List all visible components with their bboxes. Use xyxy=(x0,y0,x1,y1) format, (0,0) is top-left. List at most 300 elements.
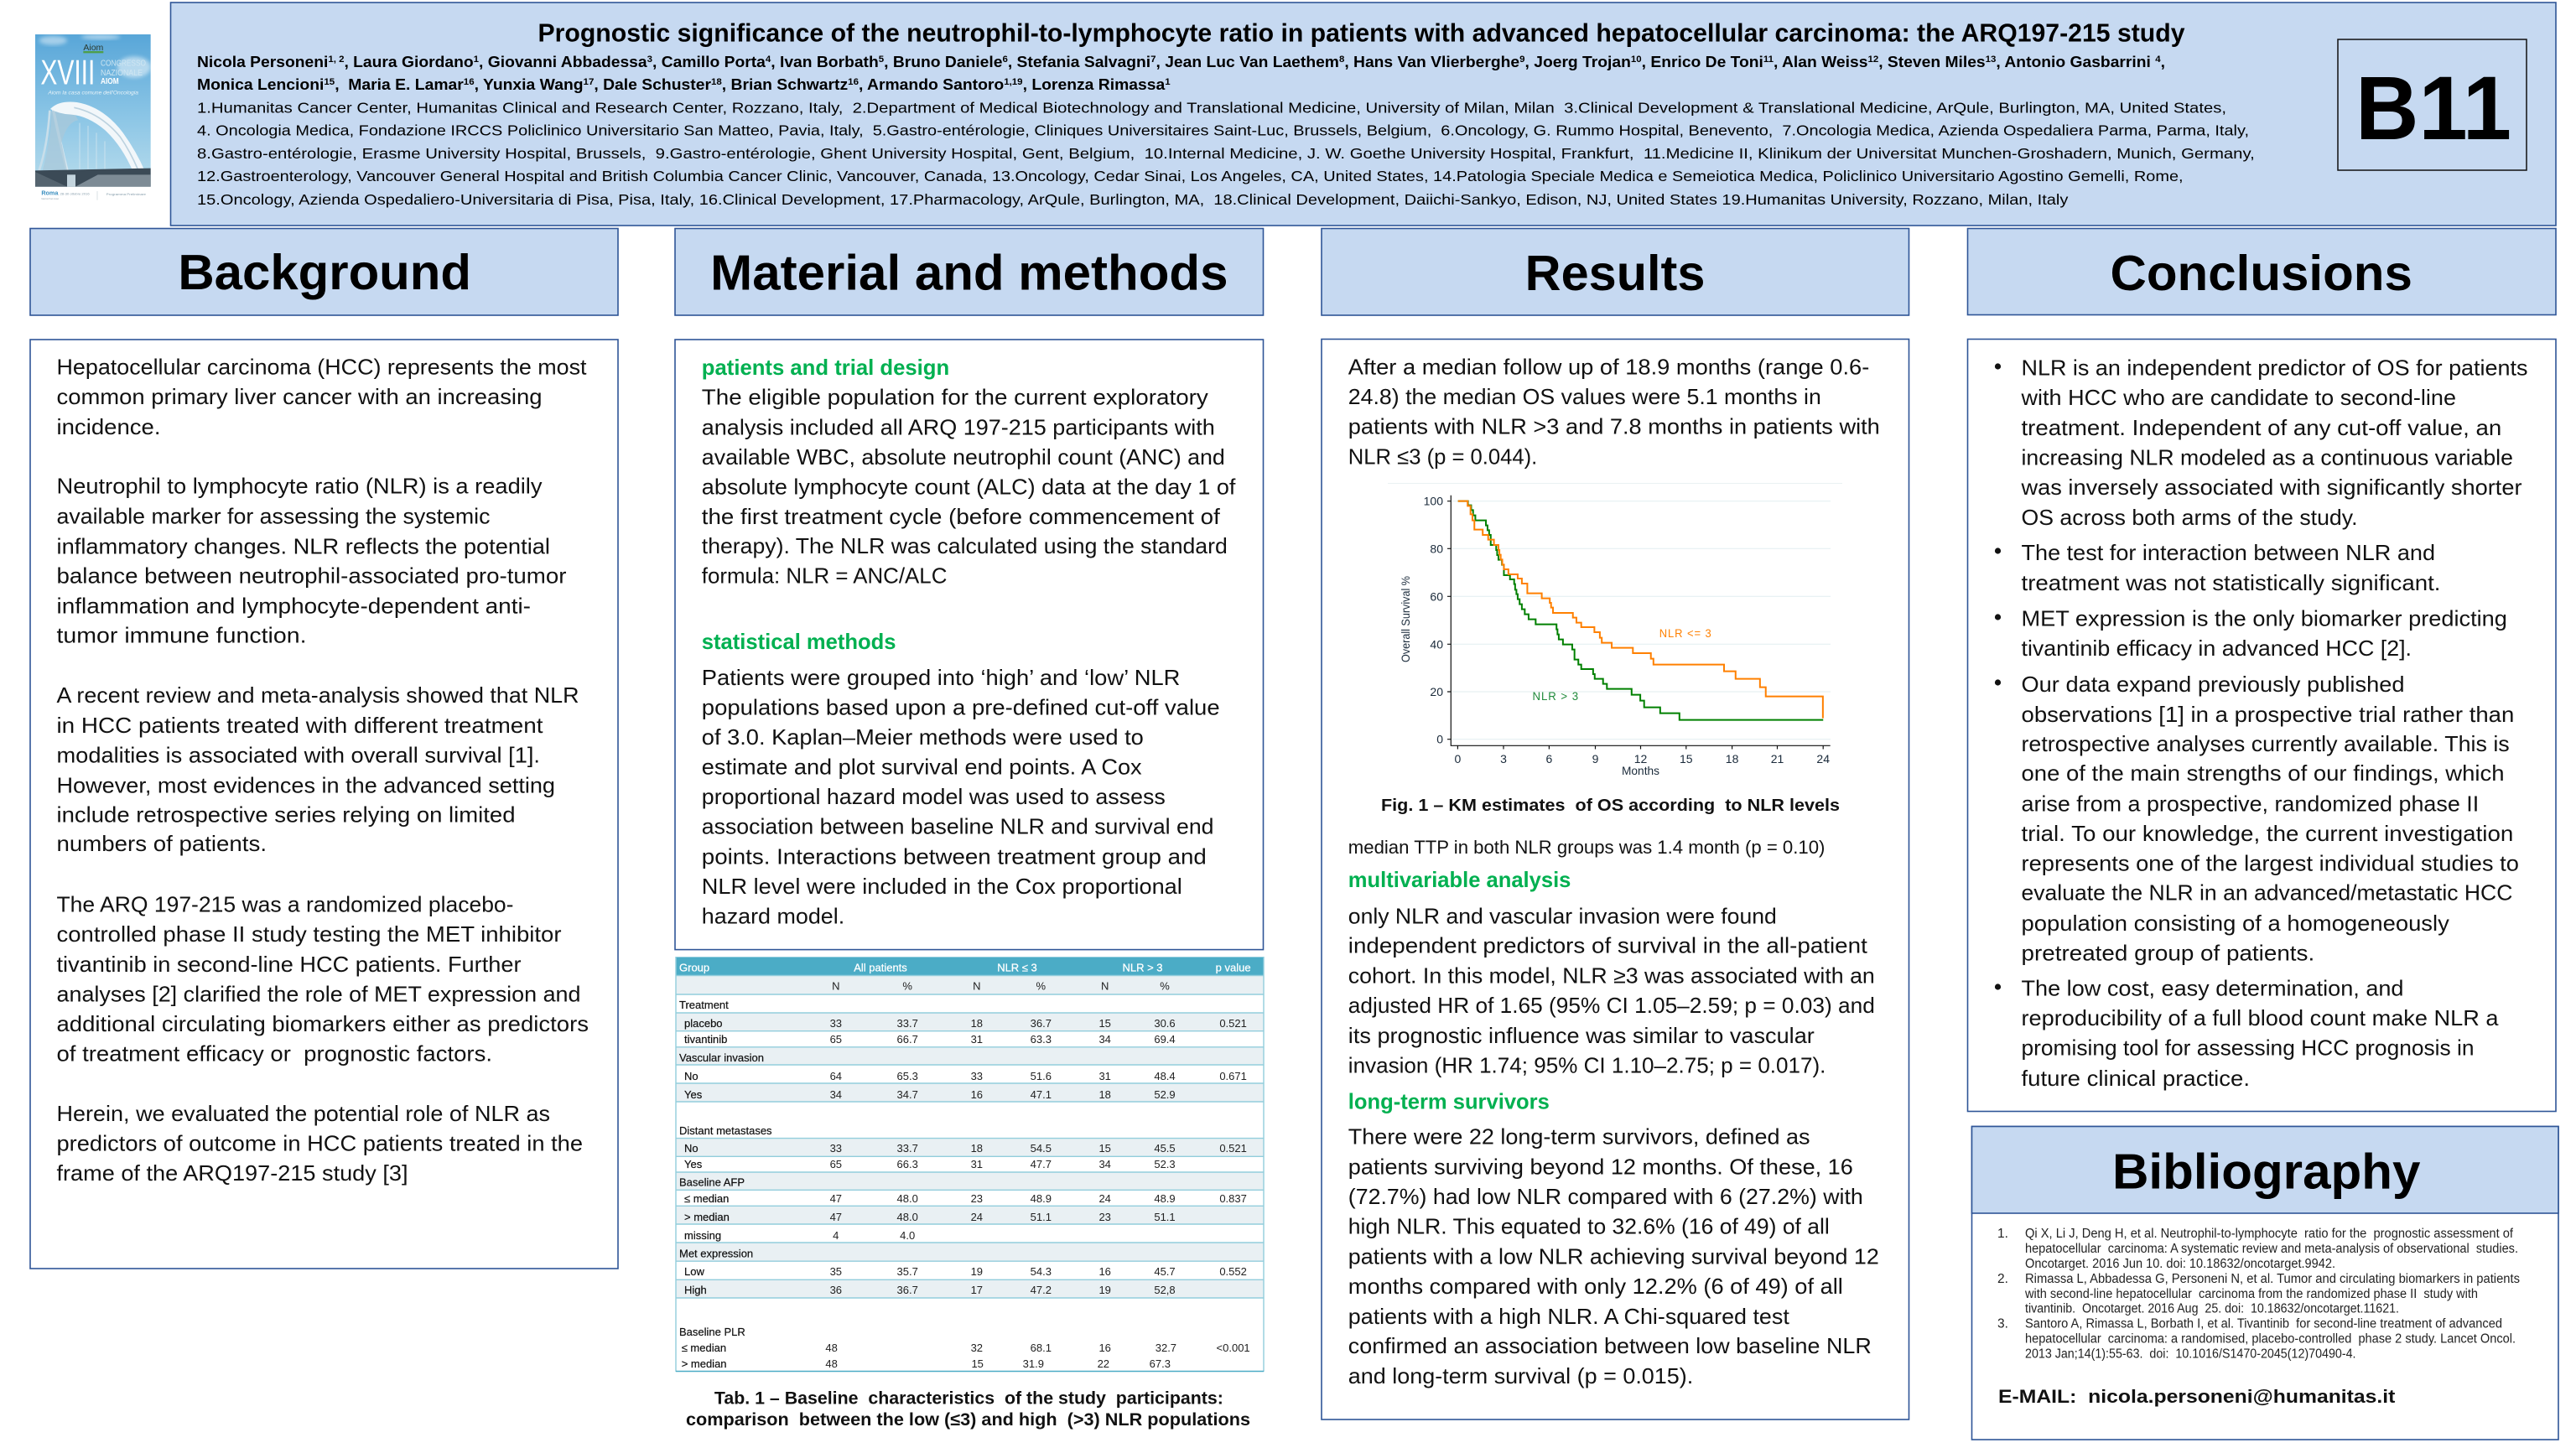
authors: , Armando Santoro xyxy=(859,75,1004,93)
table rows: baseline AFP: 4.0 xyxy=(900,1229,915,1242)
y axis tick labels xyxy=(1424,495,1443,746)
panel frame: bibliography xyxy=(1972,1127,2558,1440)
table rows: met expression: 54.3 xyxy=(1031,1265,1052,1278)
heading: results xyxy=(1322,228,1909,315)
heading: conclusions: Conclusions xyxy=(2110,246,2412,301)
text block: background body: numbers of patients. xyxy=(57,831,267,856)
text block: methods body: therapy). The NLR was calculated using the standard xyxy=(702,533,1228,558)
table rows: distant metastases: 31 xyxy=(971,1158,983,1170)
authors: , Ivan Borbath xyxy=(771,53,879,70)
text block: conclusions bullets: observations [1] in a prospective trial rather than xyxy=(2021,702,2514,727)
x axis tick labels: 6 xyxy=(1546,752,1553,766)
heading: material and methods: Material and methods xyxy=(710,245,1228,300)
panel: material and methods xyxy=(675,228,1264,1430)
text block: background body: balance between neutrophil-associated pro-tumor xyxy=(57,563,567,589)
heading: material and methods xyxy=(675,228,1263,315)
authors: , Yunxia Wang xyxy=(475,75,584,93)
text block: references: 3. xyxy=(1997,1316,2008,1331)
text block: background body: controlled phase II study testing the MET inhibitor xyxy=(57,921,562,947)
table sub-header row xyxy=(832,980,1170,993)
table header row: Group xyxy=(679,961,709,974)
text block: long-term survivors: (72.7%) had low NLR compared with 6 (27.2%) with xyxy=(1348,1184,1863,1209)
authors: 16 xyxy=(848,77,859,87)
text block: references: Santoro A, Rimassa L, Borbath I, et al. Tivantinib for second-line treatment of advanced xyxy=(2025,1316,2502,1331)
table caption xyxy=(686,1388,1250,1430)
authors: 3 xyxy=(647,54,652,65)
authors: 6 xyxy=(1002,54,1008,65)
table rows: distant metastases: 45.5 xyxy=(1154,1142,1176,1155)
heading: bibliography: Bibliography xyxy=(2112,1144,2421,1200)
text block: conclusions bullets: evaluate the NLR in an advanced/metastatic HCC xyxy=(2021,880,2512,906)
text block: long-term survivors: months compared with only 12.2% (6 of 49) of all xyxy=(1348,1274,1843,1299)
table sub-header row: N xyxy=(973,980,980,993)
poster footer: Programma Preliminare xyxy=(106,192,147,196)
y axis title: Overall Survival % xyxy=(1399,576,1412,662)
affiliations: 1.Humanitas Cancer Center, Humanitas Clinical and Research Center, Rozzano, Italy, 2.Department of Medical Biotechnology and Translational Medicine, University of Milan, Milan 3.Clinical Development & Translational Medicine, ArQule, Burlington, MA, United States, xyxy=(197,99,2226,116)
table rows: baseline AFP: > median xyxy=(684,1211,730,1223)
contact email: E-MAIL: nicola.personeni@humanitas.it xyxy=(1998,1386,2396,1407)
table rows: baseline AFP: 4 xyxy=(833,1229,839,1242)
table rows: met expression: Met expression xyxy=(679,1248,753,1260)
table rows: distant metastases: 33 xyxy=(830,1142,842,1155)
table rows: baseline AFP: 47 xyxy=(830,1211,842,1223)
table rows: vascular invasion: Yes xyxy=(684,1088,703,1101)
text block: methods body: association between baseline NLR and survival end xyxy=(702,814,1214,839)
authors: , Dale Schuster xyxy=(594,75,711,93)
text block: background body: Hepatocellular carcinoma (HCC) represents the most xyxy=(57,354,587,379)
table rows: treatment: tivantinib xyxy=(684,1033,727,1046)
text block: conclusions bullets: future clinical practice. xyxy=(2021,1066,2250,1091)
text block: references: tivantinib. Oncotarget. 2016 Aug 25. doi: 10.18632/oncotarget.11621. xyxy=(2025,1301,2399,1316)
text block: methods body: points. Interactions between treatment group and xyxy=(702,844,1207,869)
table rows: baseline AFP: 23 xyxy=(1098,1211,1111,1223)
poster footer: , 28-30 ottobre 2016 xyxy=(58,193,90,196)
text block: references: 2013 Jan;14(1):55-63. doi: 10.1016/S1470-2045(12)70490-4. xyxy=(2025,1347,2356,1361)
table rows: baseline AFP: Baseline AFP xyxy=(679,1176,745,1189)
authors: 1,19 xyxy=(1004,77,1023,87)
table rows: treatment: 15 xyxy=(1098,1017,1111,1030)
authors: , Enrico De Toni xyxy=(1642,53,1763,70)
table rows: met expression: High xyxy=(684,1284,707,1296)
text block: conclusions bullets: OS across both arms of the study. xyxy=(2021,505,2358,530)
text block: background body: inflammatory changes. NLR reflects the potential xyxy=(57,533,550,558)
table: baseline characteristics xyxy=(676,957,1264,1372)
text block: methods body: available WBC, absolute neutrophil count (ANC) and xyxy=(702,444,1225,470)
x axis tick labels: 18 xyxy=(1726,752,1739,766)
table rows: baseline PLR: 48 xyxy=(825,1342,838,1354)
text block: conclusions bullets: NLR is an independent predictor of OS for patients xyxy=(2021,355,2527,380)
text block: methods body xyxy=(675,340,1263,950)
text block: methods body: proportional hazard model was used to assess xyxy=(702,784,1166,809)
text block: multivariable analysis: its prognostic influence was similar to vascular xyxy=(1348,1023,1815,1048)
table rows: baseline AFP xyxy=(679,1176,1247,1242)
text block: background body: The ARQ 197-215 was a randomized placebo- xyxy=(57,891,513,916)
table sub-header row: % xyxy=(902,980,912,993)
authors: , Stefania Salvagni xyxy=(1008,53,1150,70)
heading: background xyxy=(30,228,618,315)
text block: multivariable analysis xyxy=(1348,867,1875,1078)
table rows: vascular invasion: 31 xyxy=(1098,1070,1111,1082)
table rows: distant metastases: Yes xyxy=(684,1158,703,1170)
panel: background xyxy=(30,228,618,1269)
x axis tick labels: 0 xyxy=(1455,752,1462,766)
text block: background body: analyses [2] clarified the role of MET expression and xyxy=(57,981,580,1006)
poster footer: Roma xyxy=(41,191,58,197)
panel frame: results body xyxy=(1322,339,1909,1419)
text block: conclusions bullets: treatment was not statistically significant. xyxy=(2021,570,2440,595)
text block: methods body: populations based upon a pre-defined cut-off value xyxy=(702,695,1220,720)
text block: methods body: absolute lymphocyte count (ALC) data at the day 1 of xyxy=(702,475,1236,500)
text block: references: 1. xyxy=(1997,1227,2008,1241)
table rows: distant metastases: 0.521 xyxy=(1219,1142,1247,1155)
table rows: treatment: 66.7 xyxy=(897,1033,918,1046)
x axis tick labels: 21 xyxy=(1771,752,1784,766)
text block: survival summary: 24.8) the median OS values were 5.1 months in xyxy=(1348,384,1821,409)
table rows: met expression: 19 xyxy=(971,1265,983,1278)
table sub-header row: N xyxy=(1101,980,1109,993)
table rows: treatment xyxy=(679,999,1247,1046)
table rows: distant metastases: 18 xyxy=(971,1142,983,1155)
table rows: distant metastases: 54.5 xyxy=(1031,1142,1052,1155)
authors: , Brian Schwartz xyxy=(722,75,848,93)
table rows: distant metastases: 52.3 xyxy=(1154,1158,1176,1170)
text block: multivariable analysis: multivariable analysis xyxy=(1348,867,1571,892)
authors: 13 xyxy=(1986,54,1996,65)
text block: background body: in HCC patients treated with different treatment xyxy=(57,713,543,738)
text block: conclusions bullets: pretreated group of patients. xyxy=(2021,940,2314,965)
panel: results xyxy=(1322,228,1909,1419)
table rows: distant metastases: No xyxy=(684,1142,699,1155)
text block: background body: inflammation and lymphocyte-dependent anti- xyxy=(57,594,531,619)
table rows: vascular invasion: 18 xyxy=(1098,1088,1111,1101)
congress name xyxy=(101,60,146,86)
text block: methods body: analysis included all ARQ 197-215 participants with xyxy=(702,414,1215,439)
poster footer: Marriott Park Hotel xyxy=(41,197,59,200)
x axis tick labels: 3 xyxy=(1500,752,1507,766)
authors: 4 xyxy=(2155,54,2162,65)
panel: title banner xyxy=(171,3,2556,226)
text block: conclusions bullets: The test for interaction between NLR and xyxy=(2021,540,2435,565)
text block: references: Rimassa L, Abbadessa G, Personeni N, et al. Tumor and circulating biomarkers in patients xyxy=(2025,1272,2520,1286)
table rows: met expression: 35.7 xyxy=(897,1265,918,1278)
poster number badge xyxy=(2338,39,2527,170)
authors: , Camillo Porta xyxy=(652,53,766,70)
authors: , Joerg Trojan xyxy=(1525,53,1631,70)
text block: methods body: patients and trial design xyxy=(702,355,949,380)
text block: survival summary: patients with NLR >3 and 7.8 months in patients with xyxy=(1348,414,1880,439)
table rows: baseline AFP: 0.837 xyxy=(1219,1192,1247,1205)
table rows: treatment: 69.4 xyxy=(1154,1033,1176,1046)
table rows: treatment: 34 xyxy=(1098,1033,1111,1046)
table rows: distant metastases: 66.3 xyxy=(897,1158,918,1170)
table rows: baseline AFP: 48.0 xyxy=(897,1211,918,1223)
authors: , Maria E. Lamar xyxy=(335,75,464,93)
text block: conclusions bullets: promising tool for assessing HCC prognosis in xyxy=(2021,1035,2474,1061)
table rows: met expression: 45.7 xyxy=(1154,1265,1176,1278)
table rows: met expression: 35 xyxy=(830,1265,842,1278)
table rows: vascular invasion: No xyxy=(684,1070,699,1082)
heading: background: Background xyxy=(178,245,471,300)
title: Prognostic significance of the neutrophil-to-lymphocyte ratio in patients with advanced hepatocellular carcinoma: the ARQ197-215 study xyxy=(538,18,2185,47)
text block: methods body: statistical methods xyxy=(702,629,896,654)
poster numeral: XVIII xyxy=(40,53,95,92)
series label: NLR <= 3: NLR <= 3 xyxy=(1659,626,1712,640)
table rows: baseline PLR: 31.9 xyxy=(1023,1357,1044,1370)
logo: AIOM: Aiom xyxy=(83,44,103,53)
text block: conclusions bullets: increasing NLR modeled as a continuous variable xyxy=(2021,444,2513,470)
text block: references: hepatocellular carcinoma: A systematic review and meta-analysis of observational studies. xyxy=(2025,1242,2518,1256)
text block: references: Qi X, Li J, Deng H, et al. Neutrophil-to-lymphocyte ratio for the prognostic assessment of xyxy=(2025,1227,2514,1241)
table rows: vascular invasion: 33 xyxy=(971,1070,983,1082)
text block: background body: modalities is associated with overall survival [1]. xyxy=(57,743,540,768)
authors: 10 xyxy=(1631,54,1642,65)
y axis tick labels: 20 xyxy=(1430,685,1443,698)
table rows: baseline AFP: 23 xyxy=(971,1192,983,1205)
text block: conclusions bullets: MET expression is the only biomarker predicting xyxy=(2021,605,2507,631)
y axis tick labels: 40 xyxy=(1430,637,1443,651)
table rows: baseline PLR: 22 xyxy=(1098,1357,1109,1370)
affiliations: 8.Gastro-entérologie, Erasme University Hospital, Brussels, 9.Gastro-entérologie, Ghent University Hospital, Gent, Belgium, 10.Internal Medicine, J. W. Goethe University Hospital, Frankfurt, 11.Medicine II, Klinikum der Universitat Munchen-Groshadern, Munich, Germany, xyxy=(197,145,2255,162)
table rows: treatment: 30.6 xyxy=(1154,1017,1176,1030)
table rows: distant metastases xyxy=(679,1124,1247,1170)
x axis tick labels xyxy=(1455,752,1830,766)
x axis tick labels: 9 xyxy=(1592,752,1599,766)
text block: background body: include retrospective series relying on limited xyxy=(57,802,515,827)
table sub-header row: N xyxy=(832,980,839,993)
table rows: baseline AFP: 24 xyxy=(971,1211,983,1223)
table rows: baseline PLR: <0.001 xyxy=(1217,1342,1250,1354)
table rows: distant metastases: Distant metastases xyxy=(679,1124,772,1137)
text block: methods body: estimate and plot survival end points. A Cox xyxy=(702,754,1142,779)
table rows: baseline PLR: 32 xyxy=(971,1342,983,1354)
authors: 8 xyxy=(1339,54,1344,65)
congress name: AIOM xyxy=(101,77,119,86)
table rows: baseline AFP: 47 xyxy=(830,1192,842,1205)
table rows: baseline AFP: 24 xyxy=(1098,1192,1111,1205)
text block: background body: predictors of outcome in HCC patients treated in the xyxy=(57,1131,583,1156)
text block: background body: incidence. xyxy=(57,414,161,439)
table rows: vascular invasion: 48.4 xyxy=(1154,1070,1176,1082)
table rows: met expression: 36.7 xyxy=(897,1284,918,1296)
authors: 1 xyxy=(1165,77,1171,87)
curve: NLR <= 3 xyxy=(1458,501,1823,719)
table rows: treatment: Treatment xyxy=(679,999,729,1011)
x axis tick labels: 24 xyxy=(1816,752,1830,766)
text block: conclusions bullets: was inversely associated with significantly shorter xyxy=(2020,475,2522,500)
text block: references: hepatocellular carcinoma: a randomised, placebo-controlled phase 2 study. Lancet Oncol. xyxy=(2025,1331,2516,1346)
text block: background body: Neutrophil to lymphocyte ratio (NLR) is a readily xyxy=(57,474,542,499)
table rows: met expression: 36 xyxy=(830,1284,842,1296)
authors: 1, 2 xyxy=(328,54,344,65)
table rows: baseline AFP: 48.0 xyxy=(897,1192,918,1205)
y axis tick labels: 60 xyxy=(1430,589,1443,603)
table rows: vascular invasion: 34 xyxy=(830,1088,842,1101)
text block: multivariable analysis: adjusted HR of 1.65 (95% CI 1.05–2.59; p = 0.03) and xyxy=(1348,993,1875,1018)
text block: multivariable analysis: cohort. In this model, NLR ≥3 was associated with an xyxy=(1348,963,1875,988)
text block: background body: additional circulating biomarkers either as predictors xyxy=(57,1011,589,1036)
table rows: met expression xyxy=(679,1248,1247,1296)
authors: 17 xyxy=(584,77,594,87)
text block: long-term survivors: high NLR. This equated to 32.6% (16 of 49) of all xyxy=(1348,1214,1830,1239)
table rows: baseline PLR xyxy=(679,1326,1250,1370)
table rows: vascular invasion: 51.6 xyxy=(1031,1070,1052,1082)
authors: 16 xyxy=(464,77,475,87)
text block: background body xyxy=(30,340,618,1269)
x axis title: Months xyxy=(1622,764,1659,777)
authors: , Lorenza Rimassa xyxy=(1023,75,1166,93)
authors: , Alan Weiss xyxy=(1774,53,1867,70)
text block: long-term survivors: long-term survivors xyxy=(1348,1088,1550,1113)
text block: long-term survivors: patients with a high NLR. A Chi-squared test xyxy=(1348,1304,1790,1329)
heading: conclusions xyxy=(1967,228,2556,315)
table rows: treatment: 63.3 xyxy=(1031,1033,1052,1046)
text block: survival summary: NLR ≤3 (p = 0.044). xyxy=(1348,444,1537,469)
table rows: vascular invasion: 52.9 xyxy=(1154,1088,1176,1101)
series label: NLR > 3: NLR > 3 xyxy=(1533,689,1579,703)
table header row xyxy=(679,961,1251,974)
table rows: met expression: 47.2 xyxy=(1031,1284,1052,1296)
authors: 5 xyxy=(879,54,884,65)
poster number badge: B11 xyxy=(2355,57,2511,158)
authors: , Hans Van Vlierberghe xyxy=(1344,53,1519,70)
text block: background body: frame of the ARQ197-215 study [3] xyxy=(57,1160,408,1186)
table rows: distant metastases: 34 xyxy=(1098,1158,1111,1170)
x axis tick labels: 12 xyxy=(1634,752,1647,766)
text block: background body: tivantinib in second-line HCC patients. Further xyxy=(57,952,522,977)
text block: conclusions bullets: population consisting of a homogeneously xyxy=(2021,911,2449,936)
y axis tick labels: 100 xyxy=(1424,495,1443,508)
authors: 12 xyxy=(1867,54,1878,65)
authors: 9 xyxy=(1519,54,1525,65)
authors: , Bruno Daniele xyxy=(884,53,1002,70)
y axis tick labels: 0 xyxy=(1436,733,1443,746)
text block: background body: tumor immune function. xyxy=(57,622,307,647)
affiliations: 4. Oncologia Medica, Fondazione IRCCS Policlinico Universitario San Matteo, Pavia, Italy, 5.Gastro-entérologie, Cliniques Universitaires Saint-Luc, Brussels, Belgium, 6.Oncology, G. Rummo Hospital, Benevento, 7.Oncologia Medica, Azienda Ospedaliera Parma, Parma, Italy, xyxy=(197,122,2249,139)
text block: conclusions bullets: one of the main strengths of our findings, which xyxy=(2021,760,2504,786)
text block: background body: A recent review and meta-analysis showed that NLR xyxy=(57,682,579,708)
panel: conclusions xyxy=(1967,228,2556,1112)
text block: conclusions bullets: Our data expand previously published xyxy=(2021,672,2405,697)
table rows: distant metastases: 47.7 xyxy=(1031,1158,1052,1170)
text block: methods body: The eligible population for the current exploratory xyxy=(702,384,1208,409)
table caption: Tab. 1 – Baseline characteristics of the study participants: xyxy=(714,1388,1223,1408)
text block: conclusions bullets: trial. To our knowledge, the current investigation xyxy=(2021,821,2513,846)
table rows: treatment: 31 xyxy=(971,1033,983,1046)
text block: conclusions bullets: reproducibility of a full blood count make NLR a xyxy=(2021,1005,2499,1030)
table rows: met expression: 52,8 xyxy=(1154,1284,1176,1296)
text block: conclusions bullets: represents one of the largest individual studies to xyxy=(2021,850,2519,875)
authors: Monica Lencioni xyxy=(197,75,319,93)
text block: multivariable analysis: only NLR and vascular invasion were found xyxy=(1348,903,1777,928)
text block: references: Oncotarget. 2016 Jun 10. doi: 10.18632/oncotarget.9942. xyxy=(2025,1257,2335,1271)
authors: , xyxy=(2161,53,2165,70)
authors: 15 xyxy=(324,77,335,87)
poster footer xyxy=(41,191,147,200)
heading: bibliography xyxy=(1972,1127,2558,1213)
congress name: CONGRESSO xyxy=(101,60,146,69)
table rows: baseline AFP: 51.1 xyxy=(1154,1211,1176,1223)
table rows: baseline AFP: 48.9 xyxy=(1031,1192,1052,1205)
table rows: met expression: 0.552 xyxy=(1219,1265,1247,1278)
chart axes xyxy=(1447,496,1831,750)
table rows: treatment: 33.7 xyxy=(897,1017,918,1030)
table rows: baseline AFP: 51.1 xyxy=(1031,1211,1052,1223)
affiliations xyxy=(197,99,2255,208)
table rows: vascular invasion: 47.1 xyxy=(1031,1088,1052,1101)
congress name: NAZIONALE xyxy=(101,69,143,78)
text block: background body: Herein, we evaluated the potential role of NLR as xyxy=(57,1101,550,1126)
affiliations: 12.Gastroenterology, Vancouver General Hospital and British Columbia Cancer Clinic, Vancouver, Canada, 13.Oncology, Cedar Sinai, Los Angeles, CA, United States, 14.Patologia Speciale Medica e Semeiotica Medica, Policlinico Universitario Agostino Gemelli, Rome, xyxy=(197,168,2184,184)
table rows: vascular invasion: 16 xyxy=(971,1088,983,1101)
authors: 4 xyxy=(766,54,771,65)
table rows: vascular invasion: 64 xyxy=(830,1070,842,1082)
text block: long-term survivors: confirmed an association between low baseline NLR xyxy=(1348,1333,1872,1358)
text block: background body: However, most evidences in the advanced setting xyxy=(57,772,555,797)
text block: methods body: of 3.0. Kaplan–Meier methods were used to xyxy=(702,724,1144,750)
authors: 7 xyxy=(1150,54,1156,65)
table rows: met expression: 17 xyxy=(971,1284,983,1296)
authors: , Jean Luc Van Laethem xyxy=(1156,53,1339,70)
table rows: baseline PLR: 32.7 xyxy=(1156,1342,1176,1354)
table rows: baseline PLR: Baseline PLR xyxy=(679,1326,745,1338)
text block: conclusions bullets: retrospective analyses currently available. This is xyxy=(2021,731,2510,756)
authors: , Steven Miles xyxy=(1878,53,1986,70)
text block: methods body: formula: NLR = ANC/ALC xyxy=(702,563,947,589)
text block: methods body: NLR level were included in the Cox proportional xyxy=(702,874,1182,899)
table rows: baseline PLR: 68.1 xyxy=(1031,1342,1052,1354)
table rows: treatment: 65 xyxy=(830,1033,842,1046)
authors: , Antonio Gasbarrini xyxy=(1996,53,2155,70)
table sub-header row: % xyxy=(1160,980,1170,993)
text block: median TTP: median TTP in both NLR groups was 1.4 month (p = 0.10) xyxy=(1348,837,1825,858)
text block: conclusions bullets xyxy=(1967,339,2556,1112)
table rows: met expression: 16 xyxy=(1098,1265,1111,1278)
authors xyxy=(197,53,2165,93)
x axis tick labels: 15 xyxy=(1680,752,1693,766)
table header row: p value xyxy=(1216,961,1251,974)
figure caption: Fig. 1 – KM estimates of OS according to NLR levels xyxy=(1381,797,1840,815)
affiliations: 15.Oncology, Azienda Ospedaliero-Universitaria di Pisa, Pisa, Italy, 16.Clinical Development, 17.Pharmacology, ArQule, Burlington, MA, 18.Clinical Development, Daiichi-Sankyo, Edison, NJ, United States 19.Humanitas University, Rozzano, Milan, Italy xyxy=(197,191,2069,208)
table rows: baseline PLR: 16 xyxy=(1098,1342,1111,1354)
table rows: vascular invasion: 34.7 xyxy=(897,1088,918,1101)
text block: conclusions bullets: treatment. Independent of any cut-off value, an xyxy=(2021,415,2501,440)
table rows: vascular invasion: 0.671 xyxy=(1219,1070,1247,1082)
text block: long-term survivors: and long-term survival (p = 0.015). xyxy=(1348,1363,1693,1388)
text block: conclusions bullets: tivantinib efficacy in advanced HCC [2]. xyxy=(2021,636,2412,661)
table rows: distant metastases: 65 xyxy=(830,1158,842,1170)
table rows: distant metastases: 15 xyxy=(1098,1142,1111,1155)
table rows: baseline PLR: 15 xyxy=(971,1357,984,1370)
authors: 18 xyxy=(711,77,722,87)
table rows: baseline PLR: 67.3 xyxy=(1150,1357,1171,1370)
text block: long-term survivors: There were 22 long-term survivors, defined as xyxy=(1348,1124,1810,1149)
table rows: treatment: 33 xyxy=(830,1017,842,1030)
icon: congress programme cover xyxy=(35,34,151,200)
text block: survival summary: After a median follow up of 18.9 months (range 0.6- xyxy=(1348,355,1869,380)
text block: long-term survivors: patients with a low NLR achieving survival beyond 12 xyxy=(1348,1243,1879,1269)
text block: conclusions bullets: The low cost, easy determination, and xyxy=(2021,976,2403,1001)
text block: conclusions bullets: with HCC who are candidate to second-line xyxy=(2020,385,2456,410)
text block: references xyxy=(1997,1227,2520,1361)
table rows: baseline AFP: 48.9 xyxy=(1154,1192,1176,1205)
table rows: treatment: 0.521 xyxy=(1219,1017,1247,1030)
text block: multivariable analysis: independent predictors of survival in the all-patient xyxy=(1348,933,1868,958)
text block: long-term survivors: patients surviving beyond 12 months. Of these, 16 xyxy=(1348,1155,1853,1180)
text block: background body: available marker for assessing the systemic xyxy=(57,503,490,528)
authors: 1 xyxy=(474,54,479,65)
table rows: baseline PLR: > median xyxy=(682,1357,727,1370)
panel: bibliography xyxy=(1972,1127,2558,1440)
